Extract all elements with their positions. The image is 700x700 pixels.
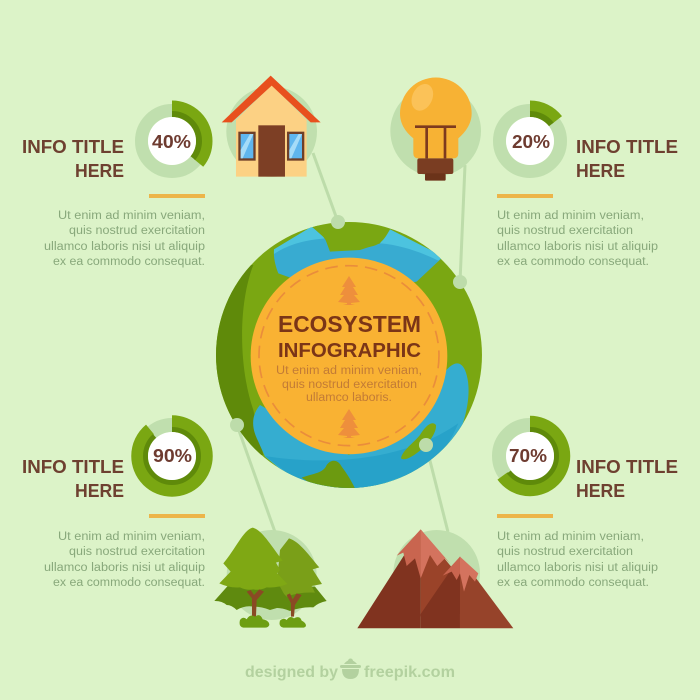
title: HERE bbox=[75, 161, 124, 181]
connector: bulb to globe bbox=[460, 165, 465, 282]
globe bbox=[210, 222, 482, 493]
heading: ecosystem infographic: INFOGRAPHIC bbox=[278, 340, 421, 362]
body text: ullamco laboris nisi ut aliquip bbox=[497, 241, 658, 253]
title bbox=[22, 457, 124, 501]
panel: info 40% bbox=[22, 106, 206, 268]
body text: quis nostrud exercitation bbox=[69, 546, 205, 558]
orange centre disc bbox=[251, 258, 447, 454]
title: INFO TITLE bbox=[22, 137, 124, 157]
icon: trees bbox=[214, 528, 327, 628]
centre description bbox=[276, 365, 422, 404]
panel: info 20% bbox=[496, 106, 678, 268]
body text: Ut enim ad minim veniam, bbox=[497, 531, 644, 543]
accent bar bbox=[497, 514, 553, 518]
body text: ex ea commodo consequat. bbox=[53, 256, 205, 268]
body text: Ut enim ad minim veniam, bbox=[58, 210, 205, 222]
donut chart 90% bbox=[138, 422, 206, 490]
body text bbox=[44, 210, 205, 268]
title bbox=[22, 137, 124, 181]
accent bar bbox=[149, 514, 205, 518]
body text: quis nostrud exercitation bbox=[497, 546, 633, 558]
body text: Ut enim ad minim veniam, bbox=[58, 531, 205, 543]
title: INFO TITLE bbox=[576, 457, 678, 477]
icon: house bbox=[222, 76, 321, 177]
heading: ecosystem infographic: ECOSYSTEM bbox=[278, 311, 421, 337]
body text bbox=[44, 531, 205, 589]
icon: tree top bbox=[338, 276, 360, 305]
donut chart 40%: 40% bbox=[152, 131, 191, 152]
body text bbox=[497, 531, 658, 589]
title: INFO TITLE bbox=[22, 457, 124, 477]
connector: trees to globe bbox=[237, 425, 275, 532]
accent bar bbox=[497, 194, 553, 198]
title bbox=[576, 137, 678, 181]
icon: light bulb bbox=[390, 77, 481, 181]
body text: ex ea commodo consequat. bbox=[497, 256, 649, 268]
donut chart 70% bbox=[496, 422, 564, 490]
icon: mountain bbox=[357, 529, 513, 628]
donut chart 70%: 70% bbox=[509, 445, 547, 466]
donut chart 20%: 20% bbox=[512, 131, 550, 152]
body text: ullamco laboris nisi ut aliquip bbox=[44, 562, 205, 574]
centre description: quis nostrud exercitation bbox=[282, 379, 417, 391]
accent bar bbox=[149, 194, 205, 198]
heading: ecosystem infographic bbox=[278, 311, 421, 362]
body text: Ut enim ad minim veniam, bbox=[497, 210, 644, 222]
title: HERE bbox=[75, 481, 124, 501]
connector dots bbox=[230, 215, 467, 452]
title: INFO TITLE bbox=[576, 137, 678, 157]
icon: freepik mascot bbox=[340, 658, 361, 679]
donut chart 40% bbox=[138, 106, 206, 176]
bush left bbox=[240, 615, 269, 628]
footer: designed by freepik: freepik.com bbox=[364, 664, 455, 681]
title: HERE bbox=[576, 161, 625, 181]
footer: designed by freepik bbox=[245, 658, 455, 681]
body text bbox=[497, 210, 658, 268]
panel: info 90% bbox=[22, 422, 206, 589]
connector: house to globe bbox=[313, 153, 338, 222]
body text: ex ea commodo consequat. bbox=[53, 577, 205, 589]
body text: ullamco laboris nisi ut aliquip bbox=[44, 241, 205, 253]
bush right bbox=[280, 617, 306, 628]
icon: tree bottom bbox=[338, 409, 360, 438]
connector: mountain to globe bbox=[426, 445, 448, 532]
centre description: Ut enim ad minim veniam, bbox=[276, 365, 422, 377]
title: HERE bbox=[576, 481, 625, 501]
footer: designed by freepik: designed by bbox=[245, 664, 338, 681]
body text: ullamco laboris nisi ut aliquip bbox=[497, 562, 658, 574]
body text: ex ea commodo consequat. bbox=[497, 577, 649, 589]
centre description: ullamco laboris. bbox=[306, 392, 392, 404]
panel: info 70% bbox=[496, 422, 678, 589]
donut chart 90%: 90% bbox=[153, 445, 192, 466]
body text: quis nostrud exercitation bbox=[497, 225, 633, 237]
donut chart 20% bbox=[496, 106, 564, 176]
body text: quis nostrud exercitation bbox=[69, 225, 205, 237]
title bbox=[576, 457, 678, 501]
